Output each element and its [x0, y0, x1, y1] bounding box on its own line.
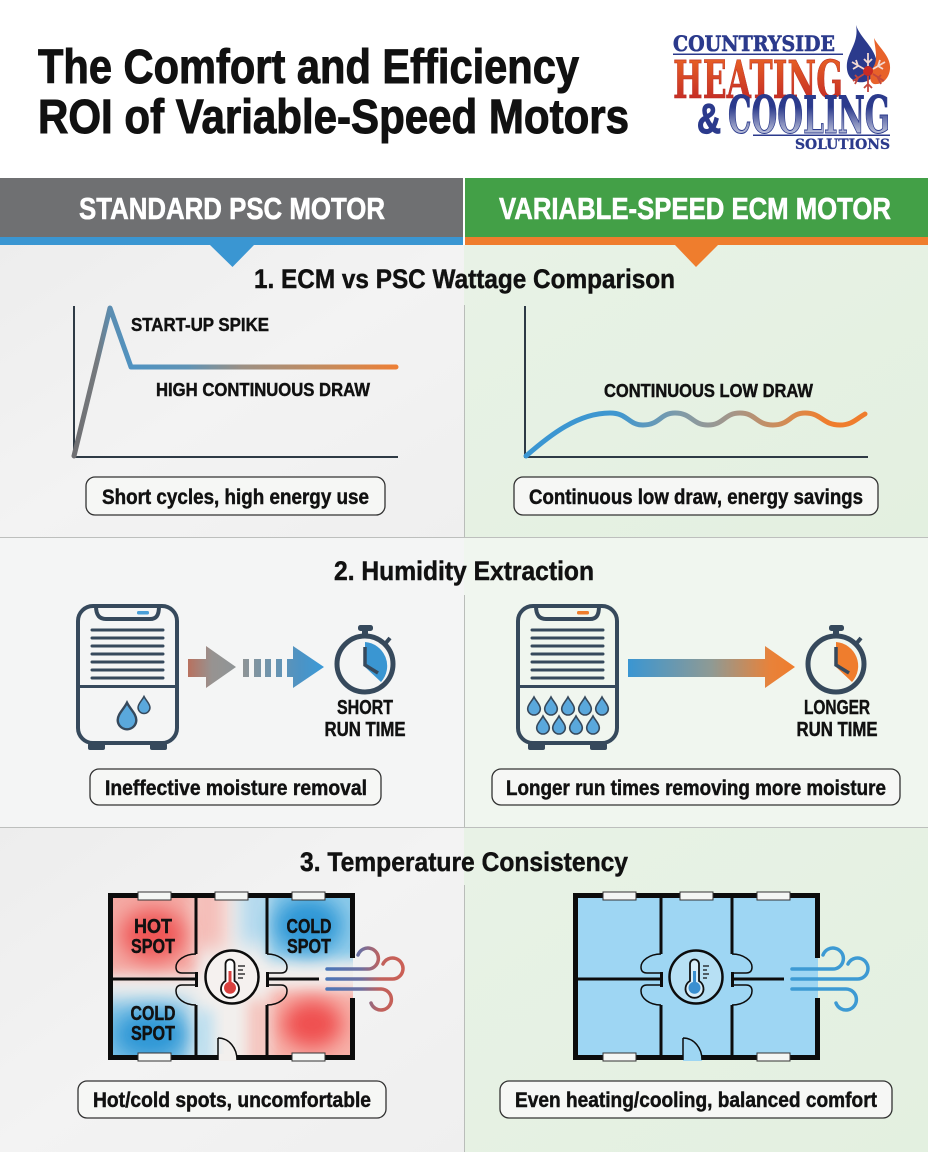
label: longer run time: RUN TIME [796, 719, 878, 741]
spot labels [130, 916, 332, 1045]
heading: wattage comparison: 1. ECM vs PSC Wattage Comparison [254, 264, 675, 294]
floor plan: even temperatures [575, 892, 868, 1061]
logo: Countryside Heating & Cooling Solutions [673, 25, 890, 153]
callout: hot/cold spots [78, 1081, 386, 1118]
chart: PSC wattage [74, 306, 398, 457]
panel header: standard PSC motor [0, 178, 463, 267]
chart: ECM wattage [525, 306, 868, 457]
label: longer run time: LONGER [804, 697, 870, 719]
icon: dehumidifier with few drops [78, 606, 177, 750]
logo: rule bottom [753, 134, 890, 136]
arrow: short stuttering airflow [188, 646, 324, 688]
logo: countryside: COUNTRYSIDE [673, 31, 835, 56]
title: ROI of Variable-Speed Motors [38, 91, 629, 144]
heading: temperature consistency: 3. Temperature Consistency [300, 847, 628, 877]
panel header: variable-speed ECM motor [465, 178, 928, 267]
spot labels: SPOT [131, 1023, 175, 1045]
icon: stopwatch longer run [808, 625, 864, 692]
spot labels: SPOT [131, 936, 175, 958]
arrow: long steady airflow [628, 646, 795, 688]
windows [138, 892, 325, 1061]
title: The Comfort and Efficiency [38, 41, 579, 94]
chart: ECM wattage: CONTINUOUS LOW DRAW [604, 381, 813, 401]
spot labels: COLD [286, 916, 332, 938]
callout: ineffective moisture removal: Ineffective moisture removal [105, 777, 367, 800]
floor plan: uneven temperatures [108, 892, 405, 1062]
icon: thermometer [670, 950, 722, 1004]
icon: thermometer [206, 950, 258, 1004]
callout: short cycles [86, 477, 385, 515]
logo: ampersand: & [697, 95, 721, 142]
logo: rule top [673, 54, 843, 55]
label: short run time: SHORT [337, 697, 393, 719]
callout: continuous low draw [514, 477, 878, 515]
heading: humidity extraction: 2. Humidity Extraction [334, 556, 594, 586]
spot labels: SPOT [287, 936, 331, 958]
icon: wind [792, 948, 868, 1010]
label: short run time: RUN TIME [324, 719, 406, 741]
callout: longer run times: Longer run times removing more moisture [506, 777, 886, 800]
callout: hot/cold spots: Hot/cold spots, uncomfortable [93, 1089, 371, 1112]
logo flames and snowflake [847, 25, 890, 92]
logo: solutions: SOLUTIONS [795, 137, 890, 153]
chart: PSC wattage: START-UP SPIKE [131, 315, 269, 335]
label: longer run time [796, 697, 878, 741]
chart: PSC wattage: HIGH CONTINUOUS DRAW [156, 380, 370, 400]
callout: longer run times [492, 769, 900, 805]
callout: short cycles: Short cycles, high energy use [102, 486, 369, 509]
panel header: standard PSC motor: STANDARD PSC MOTOR [79, 191, 385, 226]
heat map [113, 898, 353, 1055]
icon: stopwatch short run [337, 625, 393, 692]
label: short run time [324, 697, 406, 741]
walls [110, 895, 352, 1061]
windows [603, 892, 790, 1061]
spot labels: HOT [134, 916, 172, 938]
callout: even heating: Even heating/cooling, balanced comfort [515, 1089, 877, 1112]
title [38, 41, 629, 144]
icon: dehumidifier with many drops [518, 606, 617, 750]
even fill [575, 895, 818, 1058]
walls [576, 895, 818, 1061]
callout: even heating [500, 1081, 892, 1118]
panel: section backgrounds [0, 245, 928, 1152]
icon: wind [327, 948, 403, 1010]
callout: continuous low draw: Continuous low draw, energy savings [529, 486, 863, 509]
callout: ineffective moisture removal [90, 769, 381, 805]
spot labels: COLD [130, 1003, 176, 1025]
